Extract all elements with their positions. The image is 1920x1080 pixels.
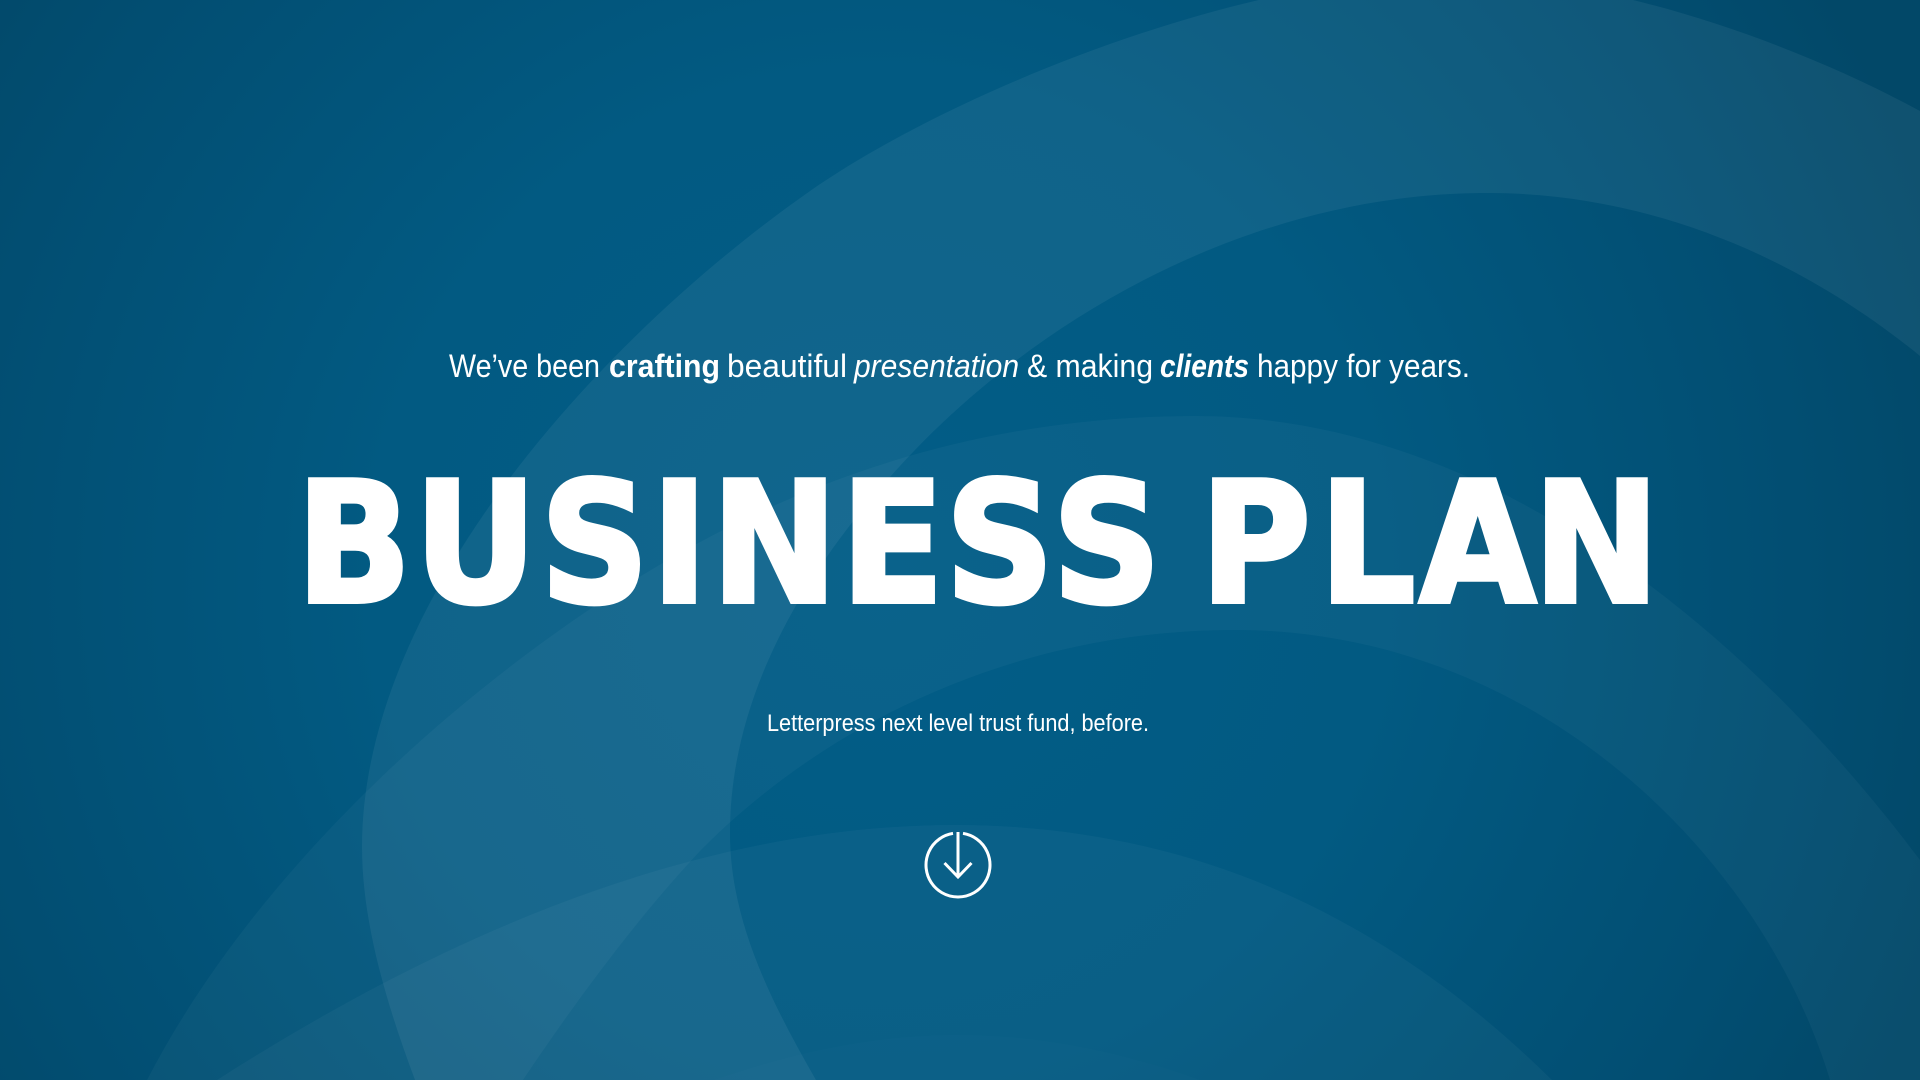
- tagline: beautiful: [727, 348, 847, 384]
- swoosh: lower arc: [217, 825, 1552, 1080]
- icon: down arrow in circle: [926, 832, 990, 897]
- tagline: presentation: [853, 348, 1019, 384]
- title: BUSINESS PLAN: [297, 448, 1659, 641]
- swoosh: middle crescent: [147, 416, 1920, 1080]
- tagline: happy for years.: [1257, 348, 1470, 384]
- tagline: [449, 348, 1470, 384]
- tagline: clients: [1160, 348, 1249, 384]
- subtitle: Letterpress next level trust fund, before.: [767, 710, 1149, 737]
- tagline: & making: [1027, 348, 1153, 384]
- swoosh: faint bottom arc: [714, 1035, 1200, 1080]
- tagline: crafting: [609, 348, 720, 384]
- tagline: We’ve been: [449, 348, 600, 384]
